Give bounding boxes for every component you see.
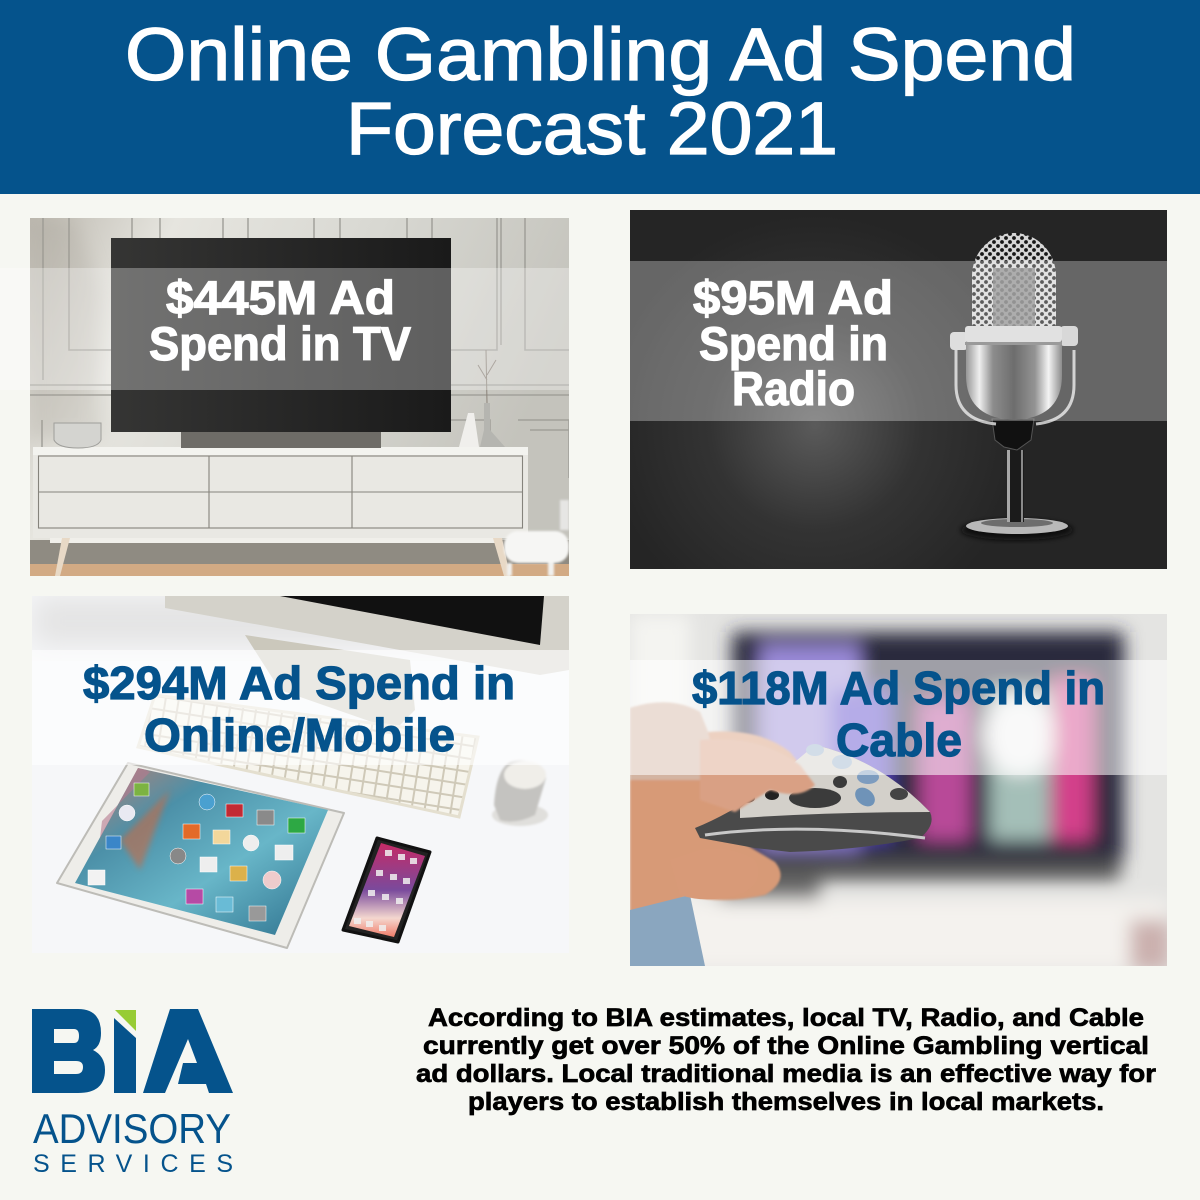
text block: summary note: According to BIA estimates, local TV, Radio, and Cable <box>428 1004 1144 1032</box>
label: $445M: $445M Ad <box>166 271 395 324</box>
TV screen <box>111 238 451 432</box>
label: $95M: Spend in <box>699 317 888 370</box>
label: $118M <box>692 662 1105 766</box>
tablet app icons <box>88 783 305 921</box>
title: Online Gambling Ad Spend <box>125 13 1076 96</box>
label: $294M: $294M Ad Spend in <box>83 657 515 709</box>
thumb <box>684 894 718 900</box>
vases <box>459 413 479 447</box>
mouse <box>492 760 548 826</box>
logo accent triangle <box>115 1010 136 1031</box>
remote <box>695 744 932 852</box>
label: $445M <box>149 271 412 370</box>
photo: living room with TV <box>30 218 569 576</box>
label: $118M: Cable <box>836 714 962 766</box>
hand <box>630 702 798 910</box>
logo: BIA Advisory Services <box>32 1009 233 1178</box>
floor <box>30 563 569 576</box>
TV stand <box>181 432 381 448</box>
photo: studio microphone <box>630 210 1167 569</box>
translucent band <box>630 261 1167 421</box>
label: $118M: $118M Ad Spend in <box>692 662 1105 714</box>
photo: desk with devices <box>32 596 569 953</box>
glass bowl <box>54 423 101 448</box>
tablet <box>57 763 344 948</box>
panel: cable ad spend <box>630 614 1170 970</box>
side table <box>504 500 569 576</box>
label: $294M: Online/Mobile <box>144 709 455 761</box>
mic cradle <box>956 350 1074 424</box>
label: $95M: $95M Ad <box>693 271 893 324</box>
logo wordmark: services: SERVICES <box>33 1150 233 1178</box>
label: $95M <box>693 271 893 415</box>
index finger over remote <box>700 739 815 812</box>
mic base and stem <box>961 520 1073 540</box>
jeans <box>630 895 705 966</box>
panel: TV ad spend <box>0 218 569 576</box>
keyboard <box>138 695 478 817</box>
header banner <box>0 0 1200 194</box>
label: $95M: Radio <box>732 362 855 415</box>
panel: radio ad spend <box>630 210 1167 569</box>
logo wordmark: advisory: ADVISORY <box>33 1105 231 1152</box>
label: $445M: Spend in TV <box>149 317 412 370</box>
logo mark: BIA letters <box>32 1009 233 1093</box>
title <box>125 13 1076 170</box>
monitor <box>245 635 415 730</box>
translucent band <box>32 650 569 765</box>
translucent band <box>630 660 1167 775</box>
mic grille <box>972 233 1056 328</box>
text block: summary note: players to establish themselves in local markets. <box>468 1088 1104 1116</box>
photo: hand with remote and blurred TV <box>630 614 1170 970</box>
text block: summary note <box>416 1004 1156 1116</box>
text block: summary note: ad dollars. Local traditional media is an effective way for <box>416 1060 1156 1088</box>
panel: online/mobile ad spend <box>32 596 569 953</box>
mic body <box>966 334 1062 420</box>
sideboard <box>33 447 528 538</box>
blurred TV and room <box>630 614 1170 970</box>
label: $294M <box>83 657 515 761</box>
text block: summary note: currently get over 50% of the Online Gambling vertical <box>423 1032 1149 1060</box>
title: Forecast 2021 <box>346 87 838 170</box>
translucent band <box>0 268 569 390</box>
phone <box>343 838 430 942</box>
